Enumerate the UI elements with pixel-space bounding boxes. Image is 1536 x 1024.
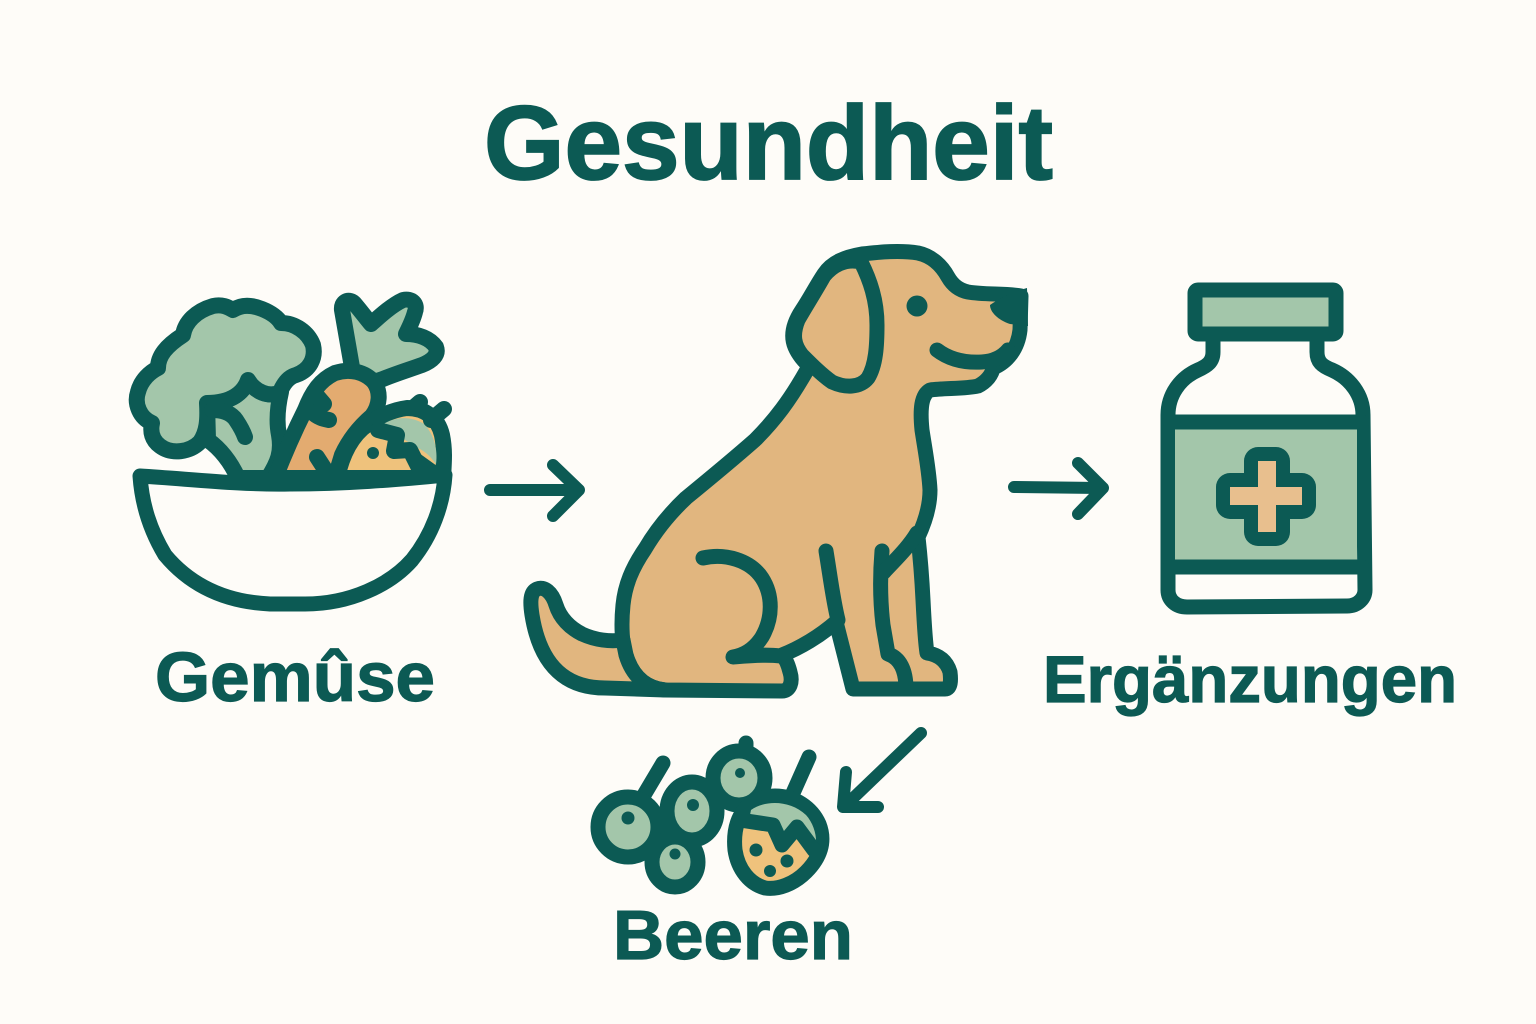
arrow: berries to dog [843,733,921,807]
arrow: bowl to dog [490,465,579,516]
bottle label [1170,422,1362,567]
icon: supplement bottle [1168,290,1365,607]
left berry [598,763,663,857]
label: Ergänzungen: Ergänzungen [1043,642,1457,716]
lower berry [652,837,698,887]
label: Gemüse: Gemûse [155,638,435,716]
strawberry in bowl [337,402,445,480]
bowl [140,475,445,604]
dog hind leg [703,556,780,657]
dog inner leg [881,551,906,689]
dog eye [906,296,928,316]
dog nose [990,288,1028,326]
icon: berries [598,743,822,888]
top berry [713,743,765,805]
arrow: dog to supplements [1014,463,1103,514]
label: Beeren: Beeren [613,896,853,974]
broccoli [137,305,314,478]
dog chest line [884,533,917,572]
title: Gesundheit [484,85,1053,202]
plus icon [1230,461,1302,532]
dog mouth [937,350,1008,362]
strawberry [735,757,822,888]
middle berry [667,782,717,840]
bottle body [1168,342,1365,607]
carrot [275,300,437,478]
icon: dog [531,251,1028,691]
dog front leg line [826,551,838,620]
bottle cap [1195,290,1336,334]
icon: vegetable bowl [137,300,445,604]
dog tail [531,588,665,690]
dog ear [795,261,877,386]
dog body [622,251,1021,691]
